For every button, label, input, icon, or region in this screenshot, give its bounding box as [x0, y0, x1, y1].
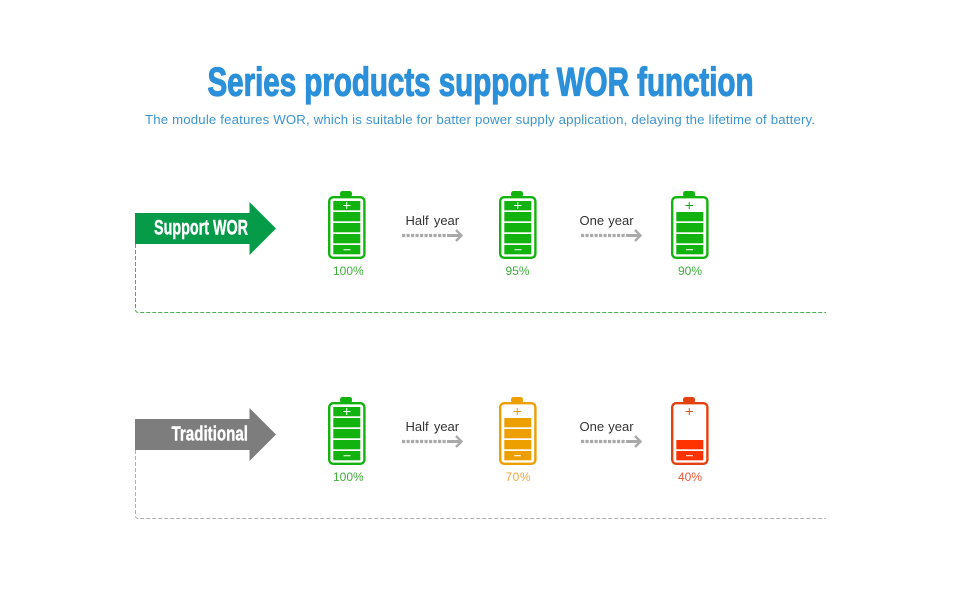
step label: one year: One year [580, 213, 634, 228]
arrow banner: support WOR: Support WOR [154, 216, 248, 240]
battery: 70% [500, 397, 535, 484]
battery: 100%: 100% [333, 264, 364, 278]
dashed connector: support WOR [136, 244, 826, 312]
battery: 40%: 40% [678, 470, 702, 484]
panel: traditional [135, 397, 826, 518]
arrow: one year [581, 230, 640, 241]
battery: 90%: 90% [678, 264, 702, 278]
subtitle: The module features WOR, which is suitable for batter power supply application, delaying the lifetime of battery. [145, 112, 815, 127]
battery: 100% [329, 397, 364, 484]
arrow banner: support WOR [135, 202, 276, 255]
title: Series products support WOR function [208, 60, 754, 104]
step label: half year: Half year [406, 213, 460, 228]
step label: one year: One year [580, 419, 634, 434]
battery: 95% [500, 191, 535, 278]
panel: support WOR [135, 191, 826, 312]
arrow: one year [581, 436, 640, 447]
battery: 70%: 70% [506, 470, 531, 484]
arrow: half year [402, 436, 462, 447]
step label: half year: Half year [406, 419, 460, 434]
arrow: half year [402, 230, 462, 241]
battery: 100% [329, 191, 364, 278]
dashed connector: traditional [136, 450, 826, 518]
battery: 100%: 100% [333, 470, 364, 484]
arrow banner: traditional: Traditional [172, 422, 248, 446]
battery: 90% [672, 191, 707, 278]
battery: 40% [672, 397, 707, 484]
battery: 95%: 95% [506, 264, 530, 278]
arrow banner: traditional [135, 408, 276, 461]
